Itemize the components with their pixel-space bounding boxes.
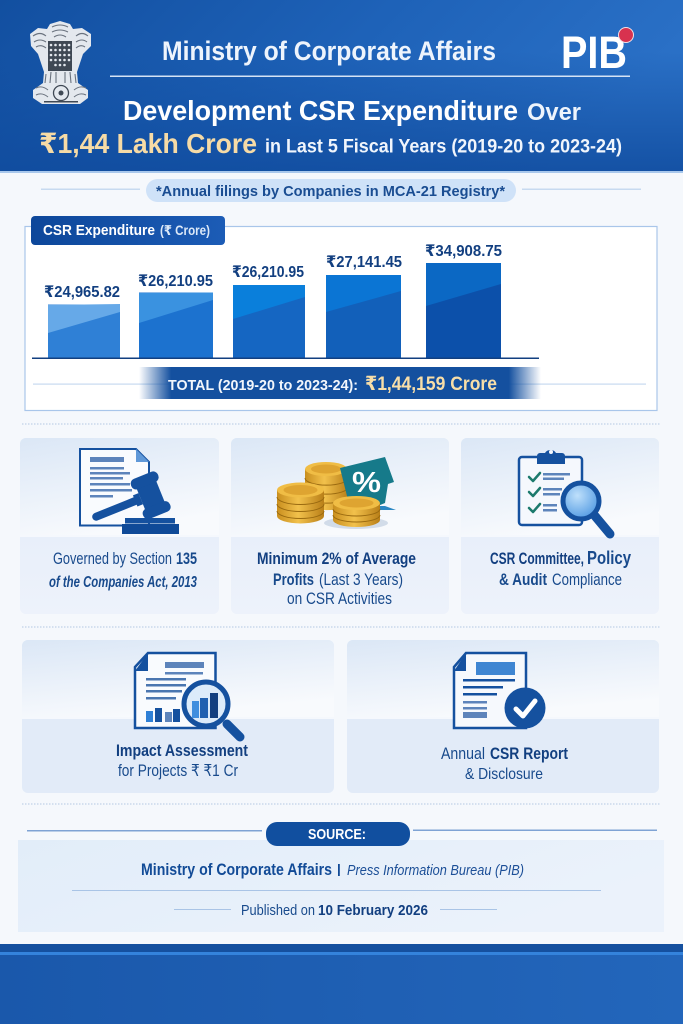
card text: CSR Committee,	[490, 549, 584, 568]
icon: coins and percent tag	[277, 457, 396, 529]
card text: Policy	[587, 548, 631, 568]
logo: PIB: PIB	[561, 27, 627, 78]
panel: annual CSR report	[347, 640, 659, 793]
panel: minimum 2 percent	[231, 438, 449, 614]
main title: Development CSR Expenditure	[123, 95, 518, 126]
bar chart: ₹27,141.45	[326, 254, 402, 271]
card text: Minimum 2% of Average	[257, 549, 416, 568]
publication date: Published on	[241, 902, 315, 919]
bar chart: ₹26,210.95	[232, 264, 304, 281]
footer band	[0, 944, 683, 1024]
bar chart: ₹24,965.82	[44, 284, 120, 301]
card text	[490, 548, 631, 589]
panel: CSR committee	[461, 438, 659, 614]
icon: report with magnifier and bars	[135, 653, 240, 737]
card text: for Projects ₹ ₹1 Cr	[118, 762, 238, 780]
card text: on CSR Activities	[287, 590, 392, 608]
panel: governed by section 135	[20, 438, 219, 614]
main title: Over	[527, 99, 581, 126]
card text: Compliance	[552, 571, 622, 589]
card text: (Last 3 Years)	[319, 571, 403, 589]
bar chart: ₹26,210.95	[138, 273, 213, 290]
main title	[39, 95, 622, 159]
publication date: 10 February 2026	[318, 902, 428, 919]
card text: Annual	[441, 745, 485, 763]
total band: TOTAL (2019-20 to 2023-24):	[168, 377, 358, 394]
card text: Governed by Section	[53, 550, 172, 568]
chart tab heading: CSR Expenditure	[43, 222, 155, 239]
chart tab heading	[31, 216, 225, 245]
bar chart: ₹34,908.75	[425, 243, 502, 260]
header rule	[110, 76, 630, 77]
header banner	[0, 0, 683, 173]
source names	[141, 861, 524, 879]
total band: ₹1,44,159 Crore	[365, 373, 497, 395]
icon: national emblem	[30, 21, 91, 104]
source names: Press Information Bureau (PIB)	[347, 863, 524, 879]
icon: clipboard and magnifier	[519, 450, 610, 534]
filing note	[41, 179, 641, 202]
source pill: SOURCE:	[308, 826, 366, 843]
chart tab heading: (₹ Crore)	[160, 223, 210, 238]
card text: Impact Assessment	[116, 741, 248, 760]
main title: in Last 5 Fiscal Years (2019-20 to 2023-24)	[265, 136, 622, 158]
main title: ₹1,44 Lakh Crore	[39, 128, 257, 159]
bar chart	[32, 243, 539, 359]
card text: of the Companies Act, 2013	[49, 574, 197, 591]
filing note: *Annual filings by Companies in MCA-21 Registry*	[156, 183, 505, 200]
source pill	[266, 822, 410, 846]
card text: CSR Report	[490, 744, 568, 763]
icon: report with check badge	[454, 653, 546, 728]
total band	[33, 367, 646, 399]
panel: impact assessment	[22, 640, 334, 793]
card text: 135	[176, 550, 197, 568]
card text: Profits	[273, 571, 314, 589]
card text: & Disclosure	[465, 766, 543, 783]
panel: CSR expenditure chart	[25, 216, 657, 410]
icon: document and gavel	[80, 449, 179, 539]
card text	[49, 550, 197, 591]
card text: & Audit	[499, 571, 547, 589]
card text	[441, 744, 568, 783]
ministry name: Ministry of Corporate Affairs	[162, 36, 496, 66]
card text	[257, 549, 416, 608]
source names: Ministry of Corporate Affairs	[141, 861, 332, 879]
panel: source	[18, 822, 664, 932]
card text	[116, 741, 248, 780]
publication date	[241, 902, 428, 919]
icon: coins and percent tag: %	[352, 467, 381, 499]
